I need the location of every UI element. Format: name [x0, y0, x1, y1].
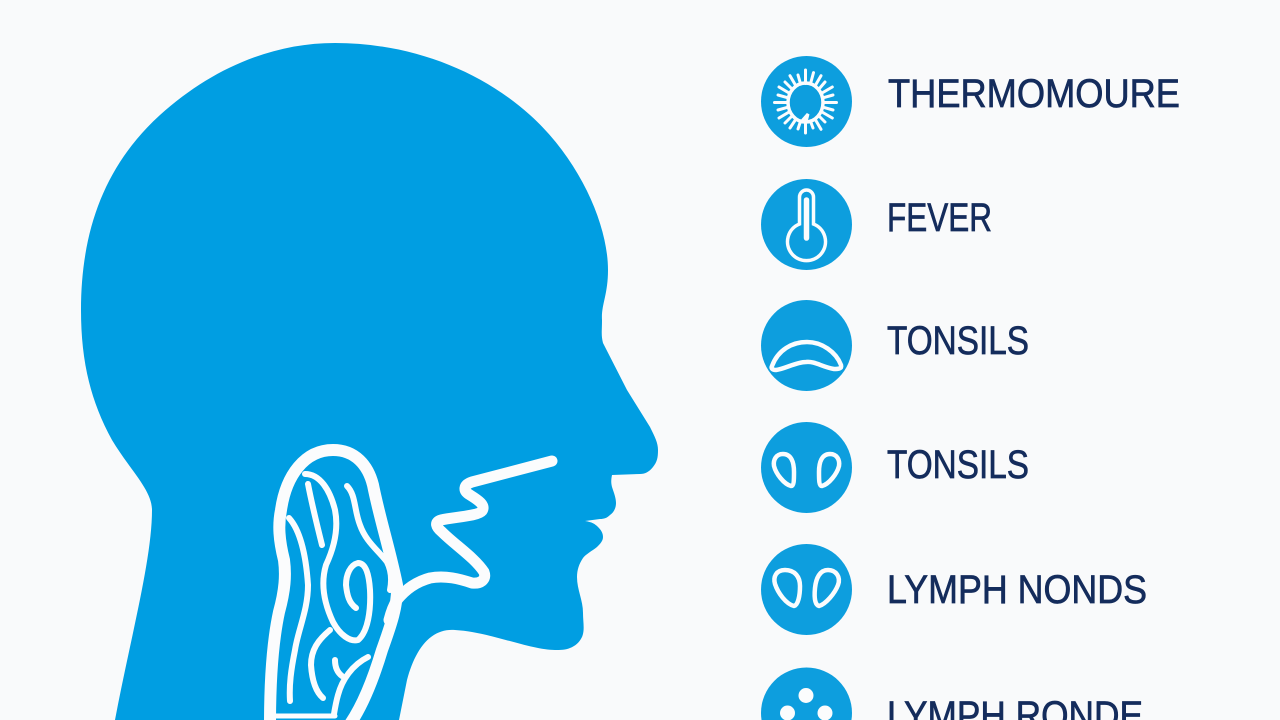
tapered inner stroke: [308, 484, 322, 545]
symptom row 4: tonsils: [761, 422, 1029, 513]
icon: lymph dots: [761, 668, 852, 720]
icon: spiky virus: [761, 56, 852, 147]
leaf shaped stroke: [334, 657, 368, 714]
small hook stroke: [335, 660, 342, 676]
inner winding stroke with spiral: [305, 474, 370, 640]
head silhouette with throat illustration: [81, 43, 658, 720]
icon: paired lymph nodes: [761, 544, 852, 635]
head profile: [81, 43, 658, 720]
symptom row 6: lymph ronde: [761, 668, 1143, 720]
symptom row 3: tonsils: [761, 300, 1029, 391]
symptom row 1: thermomoure: [761, 56, 1180, 147]
icon: tonsil arch: [761, 300, 852, 391]
label: thermomoure: THERMOMOURE: [888, 72, 1180, 116]
throat outline and airway: [270, 450, 552, 720]
upper right inner stroke: [347, 486, 391, 590]
symptom row 5: lymph nonds: [761, 544, 1147, 635]
throat base line: [272, 714, 335, 718]
label: tonsils: TONSILS: [887, 443, 1029, 487]
label: fever: FEVER: [887, 196, 992, 240]
icon: thermometer: [761, 179, 852, 270]
airway from mouth to throat: [389, 461, 552, 620]
long left inner stroke: [289, 518, 308, 701]
label: lymph nonds: LYMPH NONDS: [887, 568, 1147, 612]
label: tonsils: TONSILS: [887, 319, 1029, 363]
throat outer contour: [270, 450, 397, 720]
icon: paired tonsils: [761, 422, 852, 513]
lower inner curl: [311, 630, 330, 698]
symptom row 2: fever: [761, 179, 992, 270]
